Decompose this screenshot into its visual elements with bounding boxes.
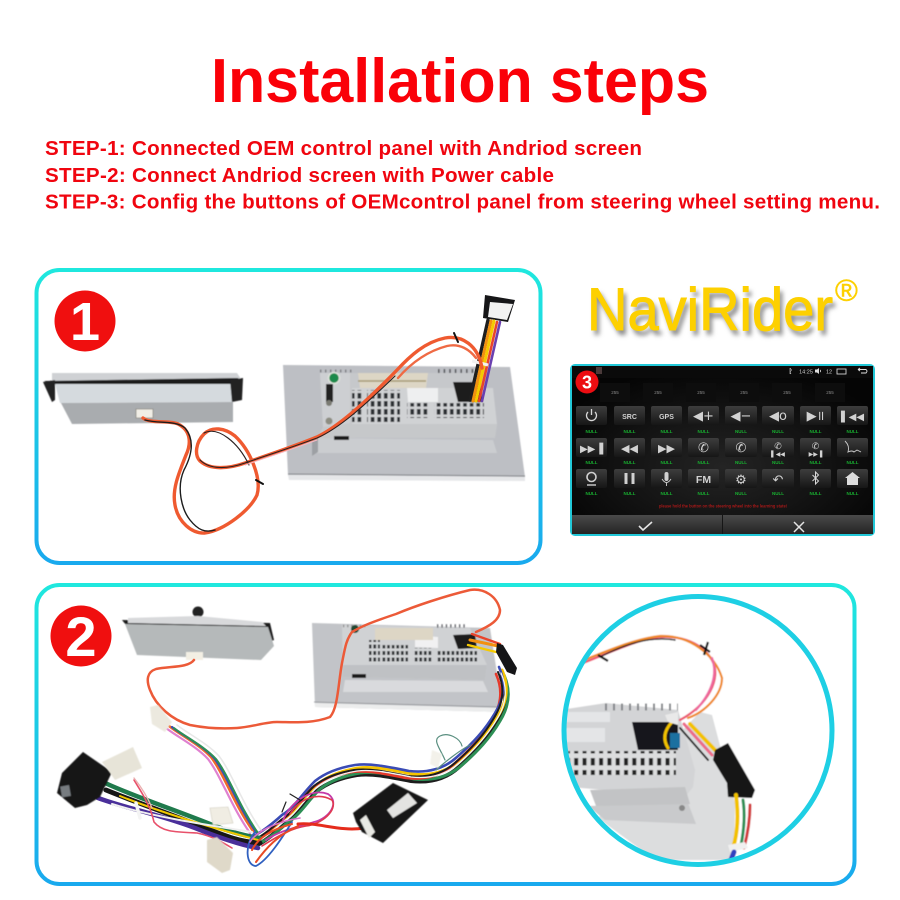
- control panel unit: [43, 373, 243, 424]
- button row 2: [576, 438, 868, 465]
- value boxes: [600, 383, 845, 402]
- button row 3: NULL: [735, 491, 747, 496]
- badge: number 1: 1: [70, 292, 100, 352]
- button row 1: [576, 406, 868, 434]
- button row 2: ▌◀◀: [770, 450, 785, 458]
- button row 2: ▶▶: [658, 442, 675, 455]
- button row 2: ◀◀: [621, 442, 638, 455]
- status bar: [572, 366, 873, 378]
- badge: number 3: 3: [582, 372, 592, 392]
- harness knot and loops: [248, 735, 470, 866]
- button row 2: NULL: [772, 460, 784, 465]
- panel: step 3 settings screen: [571, 365, 874, 535]
- cable: [143, 333, 482, 533]
- value boxes: 255: [783, 390, 791, 395]
- harness from black connector: [98, 778, 260, 848]
- button row 1: NULL: [586, 429, 598, 434]
- panel: step 1 wiring photo: [36, 270, 540, 563]
- control panel unit: [122, 606, 274, 660]
- value boxes: 255: [697, 390, 705, 395]
- wiring harness: [166, 667, 508, 847]
- button row 3: NULL: [698, 491, 710, 496]
- android head unit rear: [312, 623, 503, 712]
- value boxes: 255: [611, 390, 619, 395]
- button row 2: ✆: [774, 442, 782, 452]
- title: Installation steps: [211, 47, 709, 116]
- confirm and cancel bar: [572, 515, 873, 534]
- button row 3: NULL: [586, 491, 598, 496]
- learning hint text: please hold the button on the steering wheel into the learning state!: [659, 504, 787, 508]
- panel frame 2: [36, 585, 854, 884]
- button row 2: ✆: [698, 441, 709, 456]
- button row 1: GPS: [659, 414, 674, 421]
- badge: number 2: 2: [65, 605, 97, 668]
- button row 3: NULL: [660, 491, 673, 496]
- badge: number 3: [576, 370, 598, 394]
- step 3 text: STEP-3: Config the buttons of OEMcontrol panel from steering wheel setting menu.: [45, 190, 880, 214]
- button row 3: [576, 469, 868, 496]
- button row 2: NULL: [624, 460, 636, 465]
- logo shadow: NaviRider: [590, 281, 836, 348]
- button row 2: NULL: [810, 460, 822, 465]
- magnified detail circle: [560, 590, 840, 870]
- white connectors: [102, 705, 442, 873]
- step 1 text: STEP-1: Connected OEM control panel with Andriod screen: [45, 137, 642, 160]
- logo text: NaviRider: [587, 276, 833, 343]
- button row 1: ◀+: [693, 409, 714, 424]
- black connector: [57, 752, 112, 808]
- button row 2: NULL: [735, 460, 747, 465]
- button row 2: ✆: [736, 441, 746, 456]
- panel frame 1: [36, 270, 540, 563]
- badge: number 2: [50, 605, 112, 668]
- button row 2: ✆: [812, 442, 819, 452]
- button row 1: NULL: [846, 429, 859, 434]
- button row 1: NULL: [772, 429, 784, 434]
- button row 2: NULL: [698, 460, 710, 465]
- button row 3: FM: [696, 474, 711, 486]
- value boxes: 255: [654, 390, 662, 395]
- button row 2: NULL: [846, 460, 859, 465]
- value boxes: 255: [826, 390, 834, 395]
- button row 1: ◀−: [731, 409, 751, 424]
- button row 1: NULL: [810, 429, 822, 434]
- button row 2: NULL: [586, 460, 598, 465]
- button row 1: SRC: [622, 414, 637, 421]
- button row 3: NULL: [772, 491, 784, 496]
- button row 3: NULL: [810, 491, 822, 496]
- registered mark: ®: [835, 273, 858, 308]
- badge: number 1: [54, 290, 116, 352]
- inline connector: [496, 643, 517, 675]
- circle contents: [566, 634, 756, 860]
- screen frame: [571, 365, 874, 535]
- step 2 text: STEP-2: Connect Andriod screen with Power cable: [45, 164, 554, 187]
- circle outline: [564, 596, 832, 864]
- power connector: [470, 295, 515, 401]
- signal converter box: [353, 783, 428, 843]
- brand logo NaviRider: [587, 273, 858, 348]
- step instructions: [45, 137, 880, 214]
- status bar: 14:25: [799, 370, 813, 376]
- button row 3: ⚙: [735, 473, 747, 488]
- button row 2: ▶▶▐: [580, 442, 603, 455]
- button row 1: NULL: [698, 429, 710, 434]
- port to connector wires: [468, 634, 500, 652]
- button row 1: ▌◀◀: [840, 410, 864, 423]
- button row 2: NULL: [660, 460, 673, 465]
- button row 3: NULL: [846, 491, 859, 496]
- android head unit rear: [283, 365, 525, 481]
- button row 3: ↶: [773, 473, 784, 488]
- button row 1: NULL: [624, 429, 636, 434]
- button row 1: NULL: [660, 429, 673, 434]
- button row 2: ▶▶▐: [809, 450, 823, 458]
- button row 1: ◀o: [769, 409, 787, 424]
- status bar: 12: [826, 370, 832, 376]
- button row 1: NULL: [735, 429, 747, 434]
- button row 1: ▶॥: [807, 409, 824, 424]
- value boxes: 255: [740, 390, 748, 395]
- cable to control panel: [148, 590, 500, 728]
- panel: step 2 wiring photo: [36, 585, 854, 884]
- button row 3: NULL: [624, 491, 636, 496]
